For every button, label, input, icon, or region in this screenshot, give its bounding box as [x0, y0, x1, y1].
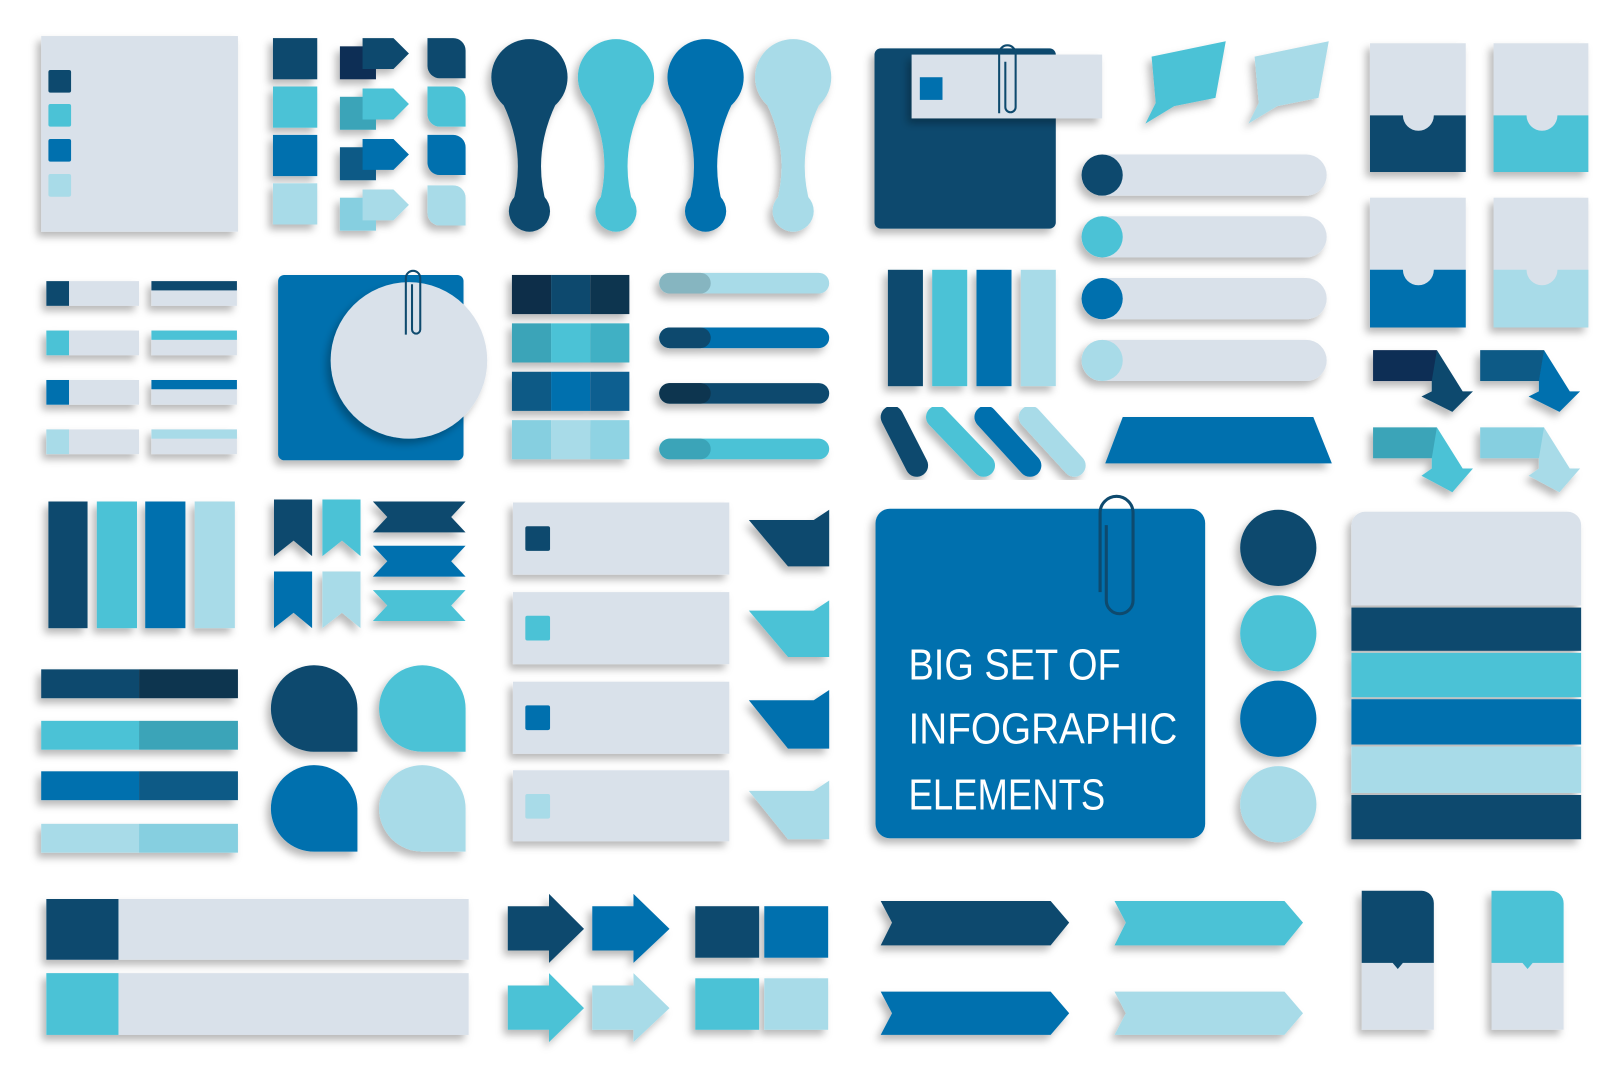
- block arrows: [508, 894, 670, 1042]
- title text: ELEMENTS: [909, 771, 1105, 819]
- toggle bars: [1082, 154, 1327, 381]
- bent arrows: [1373, 350, 1580, 492]
- circles: [1240, 510, 1316, 842]
- striped panel: [1351, 512, 1581, 839]
- chevron arrows: [749, 510, 829, 839]
- title text: INFOGRAPHIC: [909, 706, 1177, 753]
- grey panels with squares: [513, 503, 729, 841]
- pill bars: [659, 273, 829, 459]
- segmented grid: [512, 275, 629, 459]
- main title panel: [876, 496, 1205, 838]
- pocket cards: [1370, 43, 1588, 327]
- horizontal split bars: [41, 669, 238, 853]
- squares: [695, 906, 828, 1030]
- trapezoid banner: [1105, 417, 1332, 463]
- panel: dark square with label and clip: [875, 45, 1102, 229]
- bookmarks and ribbons: [274, 499, 466, 628]
- title text: BIG SET OF: [909, 642, 1121, 690]
- icons: speech bubbles: [1145, 41, 1329, 124]
- vertical bars large: [48, 502, 235, 628]
- tabs with pointer: [1362, 891, 1564, 1030]
- panel: small tags: [273, 38, 466, 231]
- icons: keyhole shapes: [491, 39, 831, 232]
- slanted stripes: [892, 417, 1074, 465]
- vertical bars small: [888, 270, 1056, 386]
- ribbon banners: [881, 901, 1303, 1035]
- small bars grid: [46, 281, 237, 454]
- speech drops: [271, 665, 466, 852]
- panel: grey note with squares: [41, 36, 238, 232]
- panel: blue square with circle: [278, 271, 487, 460]
- long bars: [46, 899, 469, 1035]
